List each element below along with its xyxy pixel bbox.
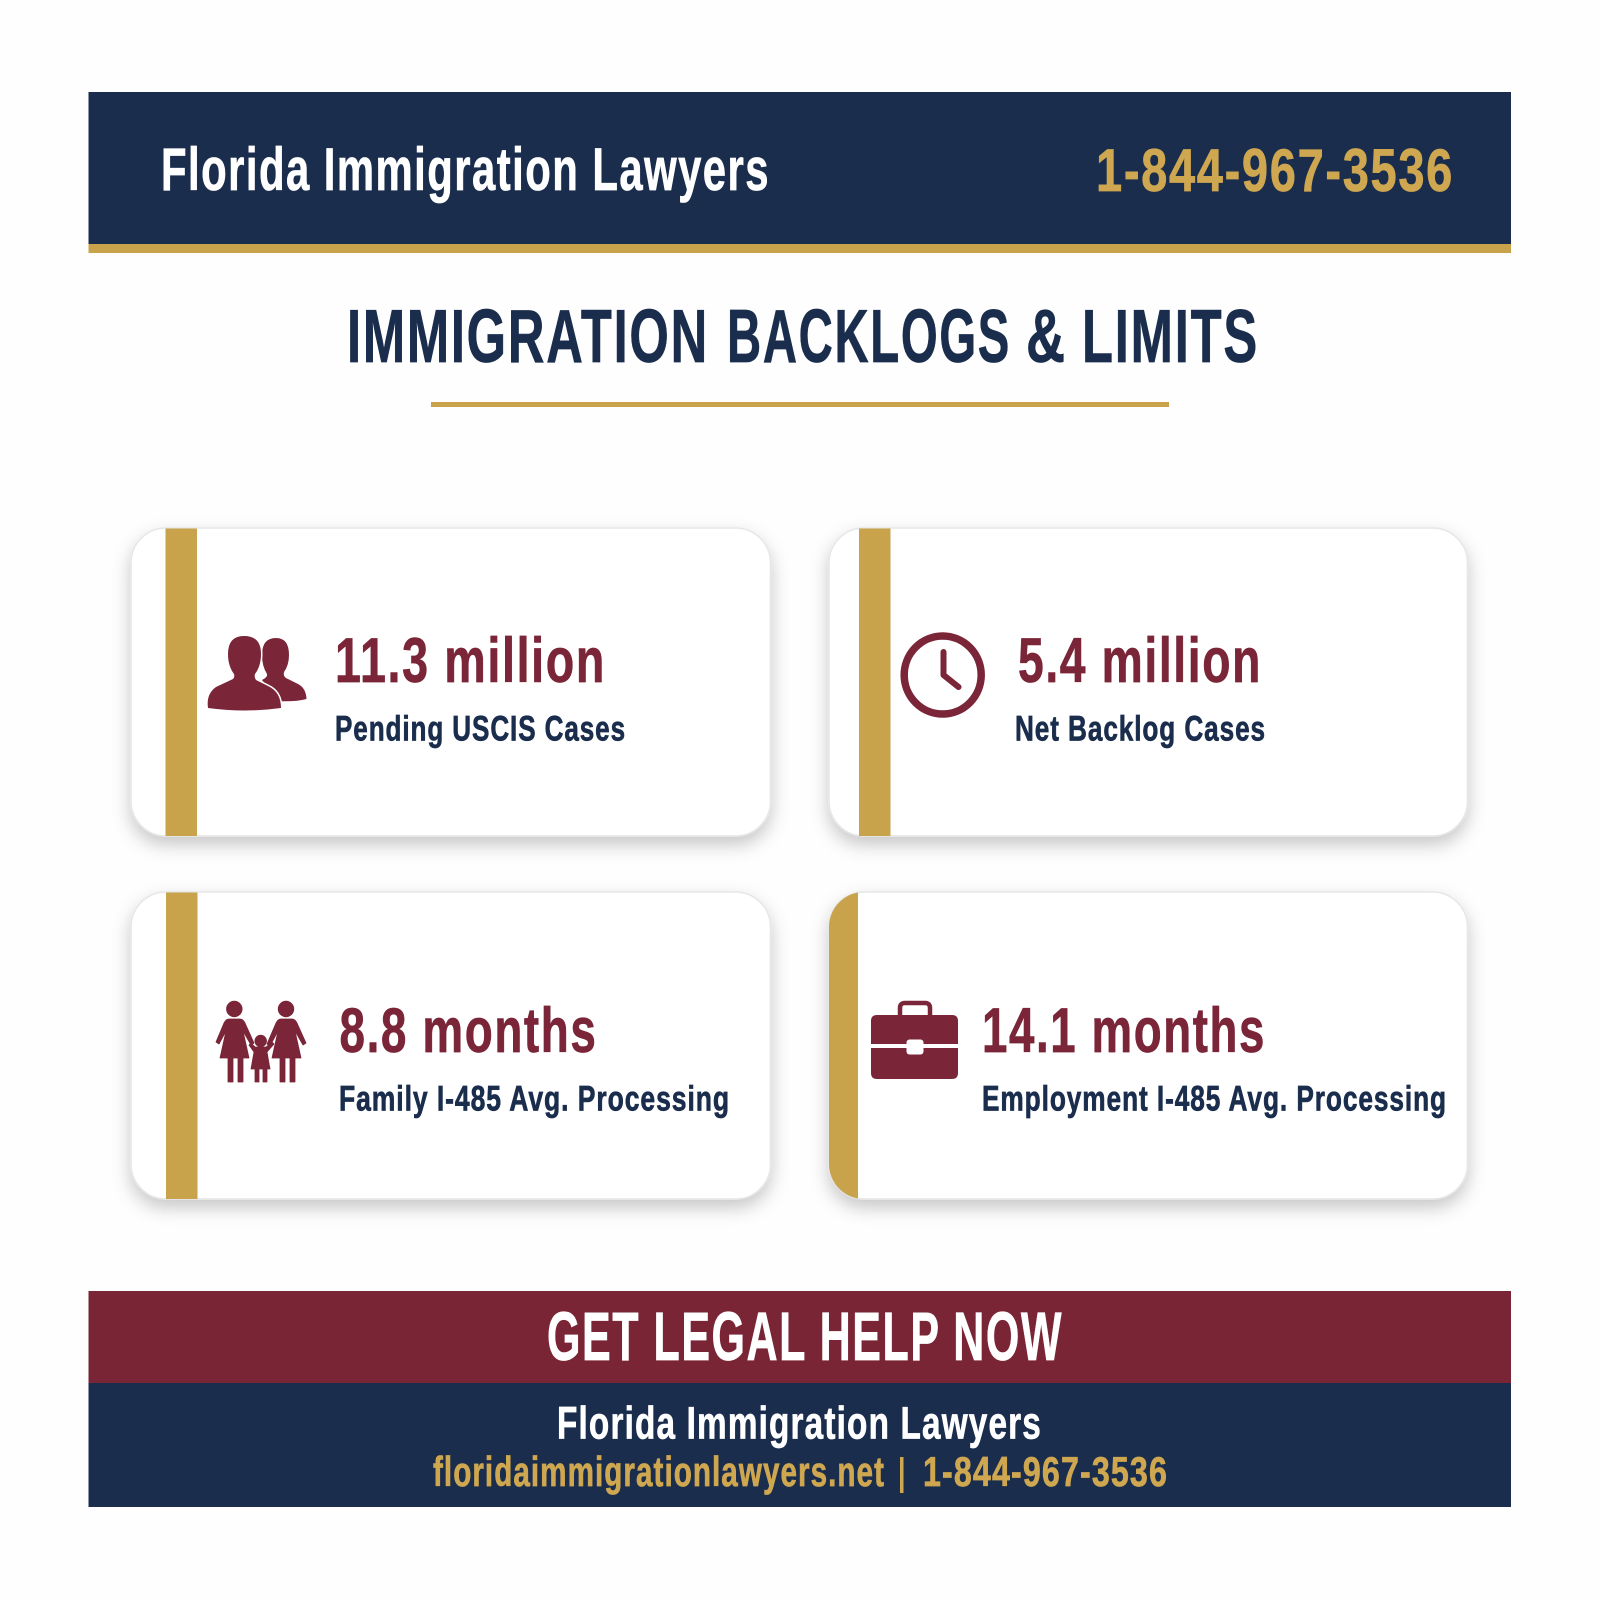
footer phone number: 1-844-967-3536: [923, 1448, 1168, 1495]
statistic label: Employment I-485 Avg. Processing: [982, 1080, 1447, 1118]
statistic label: Family I-485 Avg. Processing: [339, 1080, 730, 1118]
phone number: 1-844-967-3536: [1096, 137, 1454, 204]
icon: family: [216, 1001, 306, 1082]
title: [347, 294, 1259, 407]
statistic value: 8.8 months: [340, 996, 598, 1066]
panel: pending USCIS cases: [131, 528, 770, 836]
website: floridaimmigrationlawyers.net: [433, 1448, 885, 1495]
firm name: Florida Immigration Lawyers: [161, 136, 770, 203]
statistic value: 11.3 million: [335, 626, 606, 696]
call to action banner: [88, 1291, 1511, 1383]
icon: clock: [904, 636, 981, 714]
statistic value: 14.1 months: [982, 996, 1266, 1066]
panel: employment I-485 processing: [829, 892, 1468, 1199]
icon: two people: [208, 636, 306, 710]
footer contact panel: [88, 1383, 1511, 1507]
panel: family I-485 processing: [131, 892, 770, 1199]
title: LIMITS: [1082, 294, 1259, 378]
statistic label: Pending USCIS Cases: [335, 710, 626, 748]
title: IMMIGRATION: [347, 294, 709, 378]
title: BACKLOGS: [727, 294, 1011, 378]
title: &: [1026, 294, 1067, 378]
header banner: [88, 92, 1511, 253]
icon: briefcase: [871, 1003, 958, 1079]
statistic value: 5.4 million: [1018, 626, 1262, 696]
footer firm name: Florida Immigration Lawyers: [557, 1398, 1042, 1448]
panel: net backlog cases: [829, 528, 1468, 836]
call to action heading: GET LEGAL HELP NOW: [547, 1298, 1063, 1375]
statistic label: Net Backlog Cases: [1015, 710, 1266, 748]
